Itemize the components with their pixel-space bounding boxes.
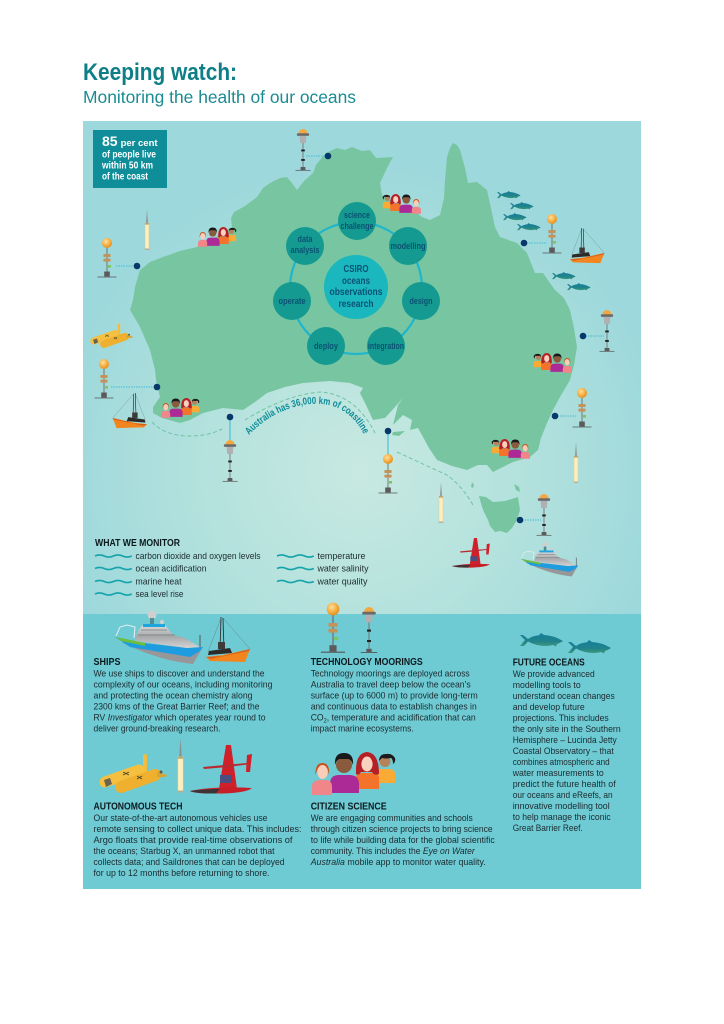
- mooring: west: [94, 359, 160, 398]
- cycle diagram: CSIRO research: observations: [330, 287, 383, 298]
- section: citizen science: CITIZEN SCIENCE: [311, 802, 387, 812]
- argo float: south: [439, 482, 443, 523]
- section: autonomous tech: the oceans; Starbug X, an unmanned robot that: [94, 846, 275, 856]
- illustration: sphere mooring: [321, 603, 345, 652]
- section: technology moorings: Australia to travel deep below the ocean’s: [311, 679, 471, 689]
- people: east: [534, 353, 572, 373]
- cycle diagram: CSIRO research: data: [298, 234, 313, 244]
- callout: 85 per cent: [93, 130, 167, 188]
- section: autonomous tech: Our state-of-the-art autonomous vehicles use: [94, 813, 268, 823]
- section: ships: complexity of our oceans, including monitoring: [94, 679, 272, 689]
- illustration: research ship: [115, 611, 203, 664]
- dashed line: Great Australian Bight west: [152, 422, 222, 436]
- mooring: north: [296, 129, 331, 170]
- what we monitor legend: marine heat: [136, 576, 182, 586]
- people: north-west: [198, 227, 236, 247]
- cycle diagram: CSIRO research: integration: [368, 341, 404, 351]
- starbug robot: west: [93, 325, 133, 344]
- panel: ocean map: [83, 121, 641, 614]
- what we monitor legend: WHAT WE MONITOR: [95, 538, 181, 549]
- section: technology moorings: TECHNOLOGY MOORINGS: [311, 657, 423, 668]
- section: ships: [94, 657, 272, 733]
- illustration: fish: [520, 633, 611, 654]
- callout: 85 per cent: of people live: [102, 150, 156, 160]
- what we monitor legend: [95, 538, 369, 599]
- section: technology moorings: CO: [311, 712, 325, 722]
- section: future oceans: We provide advanced: [513, 669, 595, 679]
- section: technology moorings: Technology moorings are deployed across: [311, 668, 470, 678]
- cycle diagram: CSIRO research: science: [344, 210, 370, 220]
- mooring: north-west: [98, 238, 140, 277]
- section: ships: 2300 kms of the Great Barrier Reef; and the: [94, 701, 260, 711]
- section: technology moorings: and continuous data to establish changes in: [311, 701, 477, 711]
- section: citizen science: community. This includes the Eye on Water: [311, 846, 476, 856]
- islands: [392, 431, 520, 492]
- section: future oceans: Hemisphere – Lucinda Jetty: [513, 735, 617, 745]
- cycle diagram: CSIRO research: research: [338, 299, 374, 310]
- saildrone: south: [452, 538, 490, 568]
- section: future oceans: modelling tools to: [513, 680, 581, 690]
- section: citizen science: Australia mobile app to monitor water quality.: [310, 857, 486, 867]
- illustration: dome mooring: [361, 607, 377, 652]
- section: ships: and protecting the ocean chemistry along: [94, 690, 252, 700]
- mooring: east: [580, 310, 614, 351]
- section: autonomous tech: collects data; and Saildrones that can be deployed: [94, 857, 284, 867]
- section: autonomous tech: Argo floats that provide real-time observations of: [94, 835, 293, 845]
- illustration: starbug robot: [104, 756, 167, 787]
- cycle diagram: CSIRO research: design: [410, 296, 433, 306]
- section: ships: We use ships to discover and understand the: [94, 668, 264, 678]
- cycle diagram: CSIRO research: deploy: [314, 341, 339, 351]
- map of Australia: [130, 143, 577, 533]
- section: future oceans: projections. This includes: [513, 713, 609, 723]
- Tasmania: [479, 496, 520, 533]
- panel: lower information band: [83, 614, 641, 889]
- section: future oceans: understand ocean changes: [513, 691, 615, 701]
- section: future oceans: [512, 658, 621, 833]
- section: citizen science: to life while building data for the global scientific: [311, 835, 495, 845]
- cycle diagram: CSIRO research: operate: [278, 296, 306, 306]
- what we monitor legend: water quality: [317, 576, 368, 586]
- callout: 85 per cent: of the coast: [102, 172, 149, 182]
- section: future oceans: and develop future: [513, 702, 585, 712]
- coastline label: Australia has 36,000 km of coastline: [246, 396, 368, 435]
- what we monitor legend: carbon dioxide and oxygen levels: [136, 551, 261, 561]
- section: future oceans: our oceans and eReefs, an: [513, 790, 613, 800]
- section: technology moorings: 2: [324, 718, 327, 724]
- section: citizen science: [310, 802, 495, 867]
- research ship: south: [521, 542, 578, 576]
- section: technology moorings: surface (up to 6000 m) to provide long-term: [311, 690, 478, 700]
- section: future oceans: Great Barrier Reef.: [513, 823, 583, 833]
- dashed line: Great Australian Bight arc: [245, 392, 375, 433]
- dashed line: Bass Strait: [397, 452, 473, 505]
- people: south-west: [161, 398, 199, 418]
- sailing boat: south-west: [113, 393, 147, 428]
- section: future oceans: the only site in the Southern: [513, 724, 621, 734]
- section: future oceans: Coastal Observatory – that: [513, 746, 614, 756]
- section: future oceans: combines atmospheric and: [513, 757, 610, 767]
- section: technology moorings: impact marine ecosystems.: [311, 723, 414, 733]
- illustration: argo float: [178, 738, 183, 793]
- section: future oceans: to help manage the iconic: [513, 812, 611, 822]
- section: citizen science: We are engaging communities and schools: [311, 813, 473, 823]
- title: Keeping watch:: [83, 59, 237, 86]
- section: autonomous tech: for up to 12 months before returning to shore.: [94, 868, 270, 878]
- section: future oceans: predict the future health of: [513, 779, 616, 789]
- section: autonomous tech: AUTONOMOUS TECH: [94, 802, 182, 812]
- what we monitor legend: ocean acidification: [136, 564, 206, 574]
- callout: 85 per cent: within 50 km: [101, 160, 153, 172]
- section: ships: RV Investigator which operates year round to: [94, 712, 266, 722]
- argo float: east: [574, 442, 578, 483]
- mooring: north-east: [521, 214, 562, 253]
- fish: north-east school: [497, 191, 591, 290]
- cycle diagram: CSIRO research: oceans: [342, 276, 370, 287]
- section: autonomous tech: remote sensing to collect unique data. This includes:: [94, 824, 302, 834]
- argo float: north-west: [145, 209, 149, 250]
- cycle diagram: CSIRO research: modelling: [390, 241, 426, 251]
- people: north: [383, 194, 421, 214]
- cycle diagram: CSIRO research: challenge: [340, 221, 374, 231]
- callout: 85 per cent: 85 per cent: [102, 133, 158, 149]
- illustration: saildrone: [190, 745, 252, 794]
- section: citizen science: through citizen science projects to bring science: [311, 824, 493, 834]
- what we monitor legend: sea level rise: [136, 589, 184, 599]
- people: south-east: [492, 439, 530, 459]
- section: future oceans: water measurements to: [512, 768, 604, 778]
- sailing boat: north-east: [570, 228, 604, 263]
- what we monitor legend: temperature: [318, 551, 366, 561]
- subtitle: Monitoring the health of our oceans: [83, 87, 356, 107]
- mooring: Tasmania: [517, 494, 552, 535]
- section: autonomous tech: [94, 802, 302, 878]
- illustration: citizen scientists: [312, 752, 395, 795]
- section: future oceans: innovative modelling tool: [513, 801, 610, 811]
- mooring: south central: [378, 428, 398, 493]
- cycle diagram: CSIRO research: [273, 202, 440, 365]
- illustration: sailing boat: [206, 617, 250, 662]
- section: ships: deliver ground-breaking research.: [94, 723, 220, 733]
- section: future oceans: FUTURE OCEANS: [513, 658, 585, 668]
- section: technology moorings: , temperature and acidification that can: [327, 712, 476, 722]
- section: technology moorings: [311, 657, 478, 733]
- cycle diagram: CSIRO research: CSIRO: [344, 264, 369, 275]
- cycle diagram: CSIRO research: analysis: [290, 245, 320, 255]
- mooring: south: [222, 414, 238, 481]
- what we monitor legend: water salinity: [317, 564, 369, 574]
- section: ships: SHIPS: [94, 657, 121, 668]
- mooring: south-east: [552, 388, 592, 427]
